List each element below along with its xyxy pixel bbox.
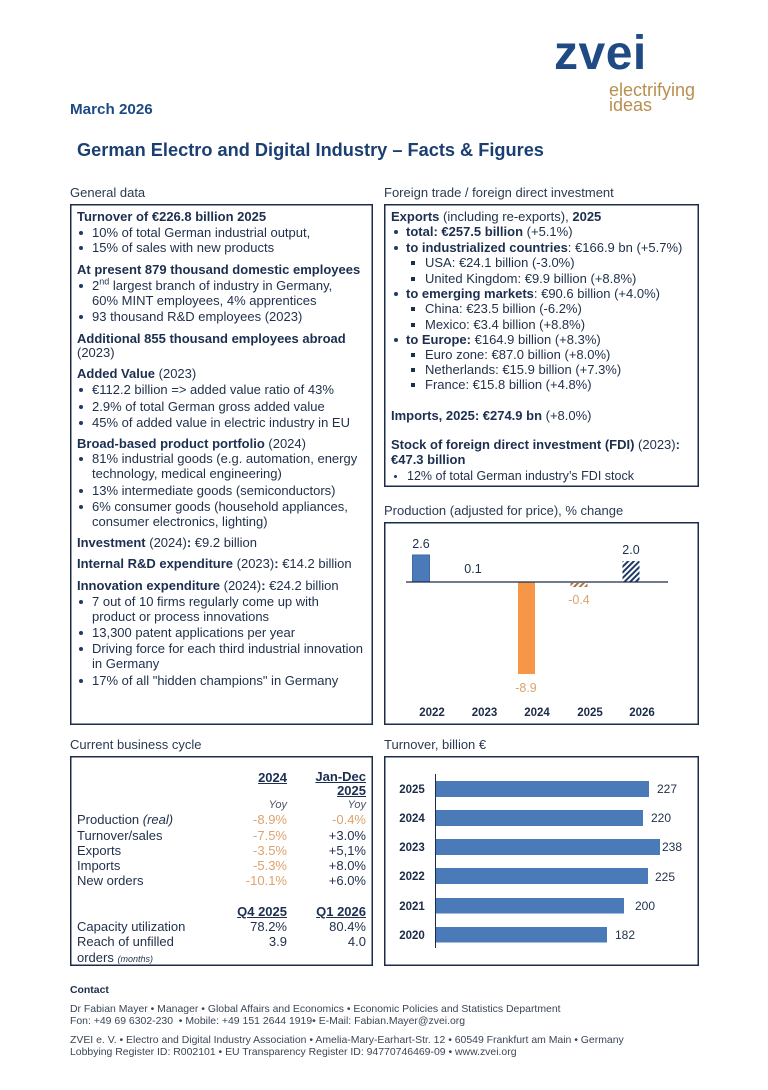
block: innovation expenditure: 17% of all "hidden champions" in Germany [92, 673, 338, 688]
panel: turnover bar chart [384, 756, 699, 966]
block: exports: total: €257.5 billion (+5.1%) [406, 224, 573, 239]
rows: capacity and orders: 4.0 [348, 934, 366, 949]
rows: indicators: +8.0% [329, 858, 366, 873]
block: product portfolio: technology, medical engineering) [92, 466, 282, 481]
panel: foreign trade [384, 204, 699, 487]
bar 2023 [399, 839, 682, 855]
bar 2022 [399, 868, 675, 884]
rows: indicators: -8.9% [253, 812, 287, 827]
contact person [70, 1004, 561, 1027]
rows: indicators: New orders [77, 873, 143, 888]
panel: current business cycle table [70, 756, 373, 966]
year labels: 2024 [524, 707, 550, 719]
block: employees abroad [77, 331, 346, 360]
bar 2025 [399, 781, 677, 797]
rows: indicators: +3.0% [329, 828, 366, 843]
block: employees: 2nd largest branch of industry in Germany, [92, 277, 332, 293]
panel: production bar chart [384, 522, 699, 725]
column headers: 2025 [337, 783, 366, 798]
bar 2021: 200 [635, 899, 655, 913]
contact person: Fon: +49 69 6302-230 • Mobile: +49 151 2644 1919• E-Mail: Fabian.Mayer@zvei.org [70, 1016, 465, 1027]
block: added value: €112.2 billion => added value ratio of 43% [92, 382, 334, 397]
axis [406, 581, 668, 583]
logo tagline: ideas [609, 95, 652, 115]
block: exports: Mexico: €3.4 billion (+8.8%) [425, 317, 585, 332]
logo wordmark: zvei [554, 27, 647, 80]
bar 2024: -8.9 [515, 681, 537, 695]
year labels [419, 707, 655, 719]
year labels: 2022 [419, 707, 445, 719]
block: product portfolio [77, 436, 358, 529]
bar 2026 [622, 543, 640, 582]
rows: capacity and orders: orders (months) [77, 950, 153, 965]
block: added value: Added Value (2023) [77, 366, 196, 381]
block: product portfolio: consumer electronics, lighting) [92, 514, 268, 529]
association details: Lobbying Register ID: R002101 • EU Transparency Register ID: 94770746469-09 • www.zvei.org [70, 1047, 517, 1058]
rows: capacity and orders: 78.2% [250, 919, 287, 934]
rows: indicators: Production (real) [77, 812, 173, 827]
column headers: Yoy [348, 799, 366, 811]
block: turnover: 15% of sales with new products [92, 240, 274, 255]
block: innovation expenditure: Innovation expenditure (2024): €24.2 billion [77, 578, 339, 593]
rows: indicators: -5.3% [253, 858, 287, 873]
bar 2020: 182 [615, 928, 635, 942]
axis [434, 774, 436, 948]
year labels: 2023 [472, 707, 497, 719]
rows: capacity and orders [77, 904, 366, 965]
contact block [70, 985, 624, 1058]
block: exports: Euro zone: €87.0 billion (+8.0%) [425, 347, 610, 362]
contact heading: Contact [70, 985, 109, 996]
rows: indicators [77, 812, 366, 888]
block: innovation expenditure: in Germany [92, 656, 159, 671]
bar 2026: 2.0 [622, 543, 640, 557]
panel: general data [70, 204, 373, 725]
block: exports: United Kingdom: €9.9 billion (+8.8%) [425, 271, 636, 286]
block: turnover: 10% of total German industrial output, [92, 225, 310, 240]
rows: capacity and orders: Capacity utilization [77, 919, 185, 934]
bar 2023: 238 [662, 840, 682, 854]
column headers: Yoy [269, 799, 287, 811]
year labels: 2025 [577, 707, 603, 719]
rows: indicators: -0.4% [332, 812, 366, 827]
block: exports: France: €15.8 billion (+4.8%) [425, 377, 592, 392]
bar 2021: 2021 [399, 901, 425, 913]
block: added value: 2.9% of total German gross added value [92, 399, 325, 414]
block: innovation expenditure: 7 out of 10 firms regularly come up with [92, 594, 319, 609]
block: added value: 45% of added value in electric industry in EU [92, 415, 350, 430]
block: product portfolio: 6% consumer goods (household appliances, [92, 499, 348, 514]
column headers: 2024 [258, 770, 287, 785]
block: exports: Netherlands: €15.9 billion (+7.3%) [425, 362, 621, 377]
year labels: 2026 [629, 707, 655, 719]
bar 2024: 220 [651, 811, 671, 825]
bar 2022: 225 [655, 870, 675, 884]
bar 2022: 2022 [399, 871, 425, 883]
block: exports: Exports (including re-exports), 2025 [391, 209, 601, 224]
block: innovation expenditure: product or process innovations [92, 609, 269, 624]
block: product portfolio: Broad-based product portfolio (2024) [77, 436, 306, 451]
bar 2023: 0.1 [464, 562, 482, 576]
block: imports: Imports, 2025: €274.9 bn (+8.0%) [391, 408, 592, 423]
block: employees: 60% MINT employees, 4% apprentices [92, 293, 316, 308]
rows: indicators: Turnover/sales [77, 828, 162, 843]
block: FDI: €47.3 billion [391, 452, 465, 467]
block: investment: Investment (2024): €9.2 billion [77, 535, 257, 550]
bar 2020: 2020 [399, 930, 425, 942]
logo tagline: electrifying [609, 80, 695, 100]
block: exports: to industrialized countries: €166.9 bn (+5.7%) [406, 240, 682, 255]
block: FDI: 12% of total German industry’s FDI stock [407, 469, 634, 483]
block: employees [77, 262, 360, 324]
block: exports: China: €23.5 billion (-6.2%) [425, 301, 582, 316]
heading: production: Production (adjusted for price), % change [384, 503, 623, 518]
bar 2025: -0.4 [568, 593, 590, 607]
contact person: Dr Fabian Mayer • Manager • Global Affairs and Economics • Economic Policies and Statistics Department [70, 1004, 561, 1015]
block: FDI: Stock of foreign direct investment (FDI) (2023): [391, 437, 680, 452]
column headers: Jan-Dec [315, 769, 366, 784]
rows: capacity and orders: Reach of unfilled [77, 934, 174, 949]
block: R&D expenditure: Internal R&D expenditure (2023): €14.2 billion [77, 556, 352, 571]
heading: current business cycle: Current business cycle [70, 737, 202, 752]
block: employees abroad: (2023) [77, 345, 115, 360]
bar 2022: 2.6 [412, 537, 430, 551]
rows: capacity and orders: Q4 2025 [237, 904, 287, 919]
block: exports: USA: €24.1 billion (-3.0%) [425, 255, 575, 270]
logo tagline [609, 80, 695, 115]
rows: capacity and orders: 3.9 [269, 934, 287, 949]
block: turnover: Turnover of €226.8 billion 2025 [77, 209, 266, 224]
rows: indicators: -10.1% [246, 873, 287, 888]
title: German Electro and Digital Industry – Facts & Figures [77, 140, 544, 160]
date: March 2026 [70, 101, 153, 118]
block: innovation expenditure: 13,300 patent applications per year [92, 625, 295, 640]
heading: general data: General data [70, 185, 145, 200]
heading: turnover: Turnover, billion € [384, 737, 486, 752]
bar 2023: 2023 [399, 842, 425, 854]
association details [70, 1035, 624, 1058]
block: innovation expenditure [77, 578, 363, 688]
association details: ZVEI e. V. • Electro and Digital Industry Association • Amelia-Mary-Earhart-Str. 12 • 60549 Frankfurt am Main • Germany [70, 1035, 624, 1046]
block: product portfolio: 13% intermediate goods (semiconductors) [92, 483, 336, 498]
bar 2021 [399, 898, 655, 914]
block: exports: to Europe: €164.9 billion (+8.3%) [406, 332, 601, 347]
block: exports: to emerging markets: €90.6 billion (+4.0%) [406, 286, 660, 301]
rows: indicators: +6.0% [329, 873, 366, 888]
block: employees: 93 thousand R&D employees (2023) [92, 309, 302, 324]
bar 2025: 227 [657, 782, 677, 796]
bar 2025: 2025 [399, 784, 425, 796]
block: exports [391, 209, 682, 392]
block: employees: At present 879 thousand domestic employees [77, 262, 360, 277]
bar 2024 [399, 810, 671, 826]
block: added value [77, 366, 350, 430]
block: innovation expenditure: Driving force for each third industrial innovation [92, 641, 363, 656]
rows: indicators: -3.5% [253, 843, 287, 858]
bar 2020 [399, 927, 635, 942]
rows: indicators: -7.5% [253, 828, 287, 843]
block: employees abroad: Additional 855 thousand employees abroad [77, 331, 346, 346]
block: turnover [77, 209, 310, 255]
heading: foreign trade: Foreign trade / foreign direct investment [384, 185, 614, 200]
rows: indicators: +5,1% [329, 843, 366, 858]
bar 2025 [568, 583, 590, 607]
rows: indicators: Imports [77, 858, 120, 873]
rows: capacity and orders: 80.4% [329, 919, 366, 934]
logo: zvei electrifying ideas [554, 27, 695, 115]
block: product portfolio: 81% industrial goods (e.g. automation, energy [92, 451, 357, 466]
block: FDI [391, 437, 680, 483]
rows: capacity and orders: Q1 2026 [316, 904, 366, 919]
column headers [258, 769, 366, 811]
rows: indicators: Exports [77, 843, 121, 858]
bar 2024: 2024 [399, 813, 425, 825]
bar 2022 [412, 537, 430, 582]
bar 2024 [515, 582, 537, 695]
